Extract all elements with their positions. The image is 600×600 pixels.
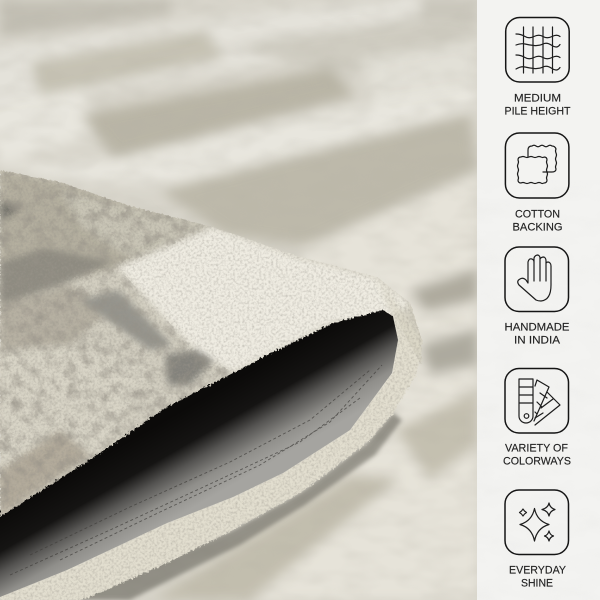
label: cotton backing: COTTON xyxy=(515,208,560,220)
panel: features sidebar xyxy=(477,0,600,600)
feature: variety of colorways xyxy=(503,368,571,467)
label: handmade in india: HANDMADE xyxy=(504,321,570,333)
icon: sparkles xyxy=(505,490,568,554)
shadow under fold xyxy=(70,413,402,600)
label: cotton backing xyxy=(512,208,562,233)
label: handmade in india: IN INDIA xyxy=(514,334,561,346)
label: handmade in india xyxy=(504,321,570,346)
label: variety of colorways xyxy=(503,442,571,467)
mottled wool shading xyxy=(0,171,230,507)
rug backing with inner shadow xyxy=(0,308,398,597)
label: medium pile height: MEDIUM xyxy=(514,92,561,104)
rug top fold xyxy=(0,170,423,517)
icon: hand xyxy=(505,247,568,312)
feature: cotton backing xyxy=(505,133,569,233)
feature: medium pile height xyxy=(504,18,571,117)
icon: pile weave xyxy=(506,18,569,82)
label: variety of colorways: VARIETY OF xyxy=(505,442,568,454)
feature: handmade in india xyxy=(504,247,570,346)
lower rug layer rim xyxy=(0,316,418,600)
rug photograph xyxy=(0,0,477,600)
label: medium pile height: PILE HEIGHT xyxy=(504,105,571,117)
label: cotton backing: BACKING xyxy=(512,221,562,233)
icon: colour fan deck xyxy=(505,368,568,433)
icon: fabric swatches xyxy=(505,133,569,198)
label: everyday shine: EVERYDAY xyxy=(509,564,567,576)
label: everyday shine xyxy=(509,564,567,589)
background rug pattern xyxy=(0,0,477,600)
feature: everyday shine xyxy=(505,490,568,589)
backing stitch lines xyxy=(10,365,382,575)
label: everyday shine: SHINE xyxy=(521,577,553,589)
label: variety of colorways: COLORWAYS xyxy=(503,455,571,467)
label: medium pile height xyxy=(504,92,571,117)
